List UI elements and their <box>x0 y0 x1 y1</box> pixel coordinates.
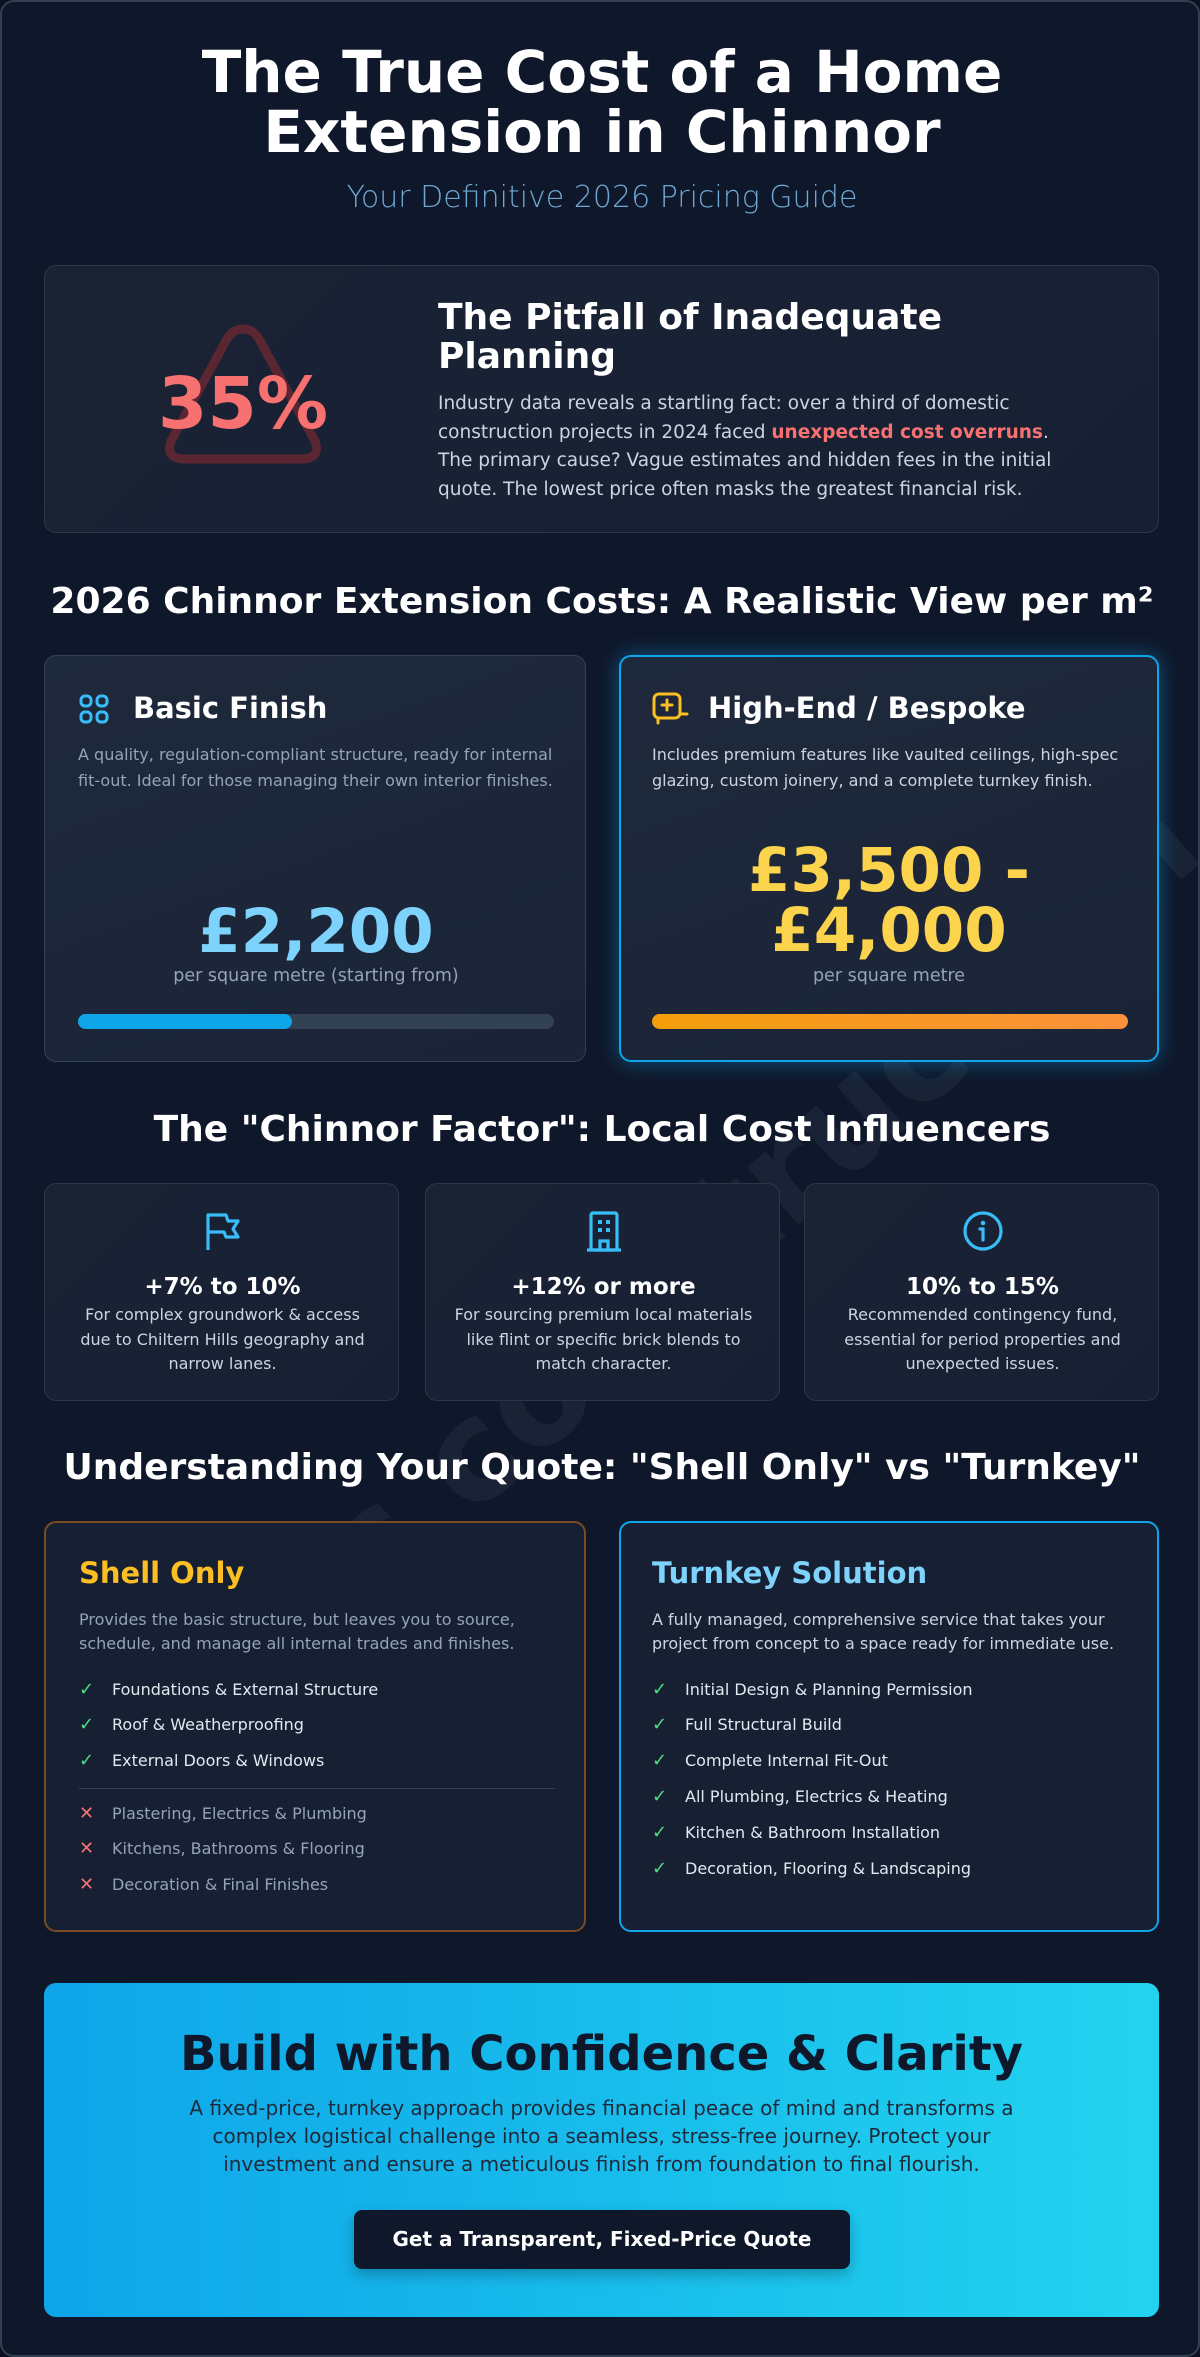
icon: flag <box>206 1213 240 1250</box>
panel: groundwork factor <box>44 1183 399 1401</box>
panel: shell only <box>44 1521 586 1932</box>
included list <box>79 1679 555 1895</box>
included list: ✓ <box>79 1679 94 1700</box>
included list: ✓ <box>79 1714 94 1735</box>
icon: warning triangle with 35% stat <box>158 324 328 464</box>
text: For sourcing premium local materials like flint or specific brick blends to match character. <box>455 1305 752 1373</box>
panel: pitfall <box>44 265 1159 533</box>
included list: Kitchen & Bathroom Installation <box>685 1823 940 1842</box>
included list: Roof & Weatherproofing <box>112 1715 304 1734</box>
description: A quality, regulation-compliant structure, ready for internal fit-out. Ideal for those managing their own interior finishes. <box>78 745 553 790</box>
included list: ✓ <box>652 1786 667 1807</box>
price: £4,000 <box>771 895 1007 966</box>
included list: Full Structural Build <box>685 1715 842 1734</box>
included list: Decoration, Flooring & Landscaping <box>685 1859 971 1878</box>
included list: ✕ <box>79 1874 94 1895</box>
included list: Foundations & External Structure <box>112 1680 378 1699</box>
included list: Kitchens, Bathrooms & Flooring <box>112 1839 365 1858</box>
included list: ✓ <box>652 1822 667 1843</box>
icon: warning triangle with 35% stat: 35% <box>158 362 328 445</box>
included list: ✓ <box>652 1714 667 1735</box>
price: £3,500 - <box>748 835 1030 906</box>
card title: Shell Only <box>79 1556 244 1590</box>
panel: basic finish <box>44 655 586 1062</box>
heading: costs: 2026 Chinnor Extension Costs: A Realistic View per m² <box>50 581 1154 622</box>
text: For complex groundwork & access due to Chiltern Hills geography and narrow lanes. <box>80 1305 365 1373</box>
body text: The primary cause? Vague estimates and hidden fees in the initial <box>438 450 1051 471</box>
included list: ✓ <box>652 1750 667 1771</box>
included list: ✓ <box>652 1679 667 1700</box>
icon: grid <box>80 694 108 724</box>
price unit: per square metre (starting from) <box>173 966 459 986</box>
description: A fully managed, comprehensive service that takes your project from concept to a space ready for immediate use. <box>652 1610 1114 1653</box>
included list: Complete Internal Fit-Out <box>685 1751 888 1770</box>
stat: +7% to 10% <box>144 1274 301 1300</box>
included list: Plastering, Electrics & Plumbing <box>112 1804 367 1823</box>
CTA body: A fixed-price, turnkey approach provides financial peace of mind and transforms a complex logistical challenge into a seamless, stress-free journey. Protect your investment and ensure a meticulous finish from foundation to final flourish. <box>189 2096 1014 2176</box>
body text: quote. The lowest price often masks the greatest financial risk. <box>438 478 1023 500</box>
card title: High-End / Bespoke <box>708 691 1026 725</box>
panel: contingency factor <box>804 1183 1159 1401</box>
title: Extension in Chinnor <box>263 98 941 166</box>
CTA button: Get a Transparent, Fixed-Price Quote <box>392 2227 811 2251</box>
stat: +12% or more <box>511 1274 696 1300</box>
included list: ✕ <box>79 1803 94 1824</box>
CTA button <box>354 2210 850 2269</box>
subtitle: Your Definitive 2026 Pricing Guide <box>347 180 857 215</box>
heading: The Pitfall of Inadequate <box>438 297 942 338</box>
heading <box>438 297 942 377</box>
price <box>748 835 1030 966</box>
heading: chinnor factor: The "Chinnor Factor": Local Cost Influencers <box>154 1109 1050 1150</box>
heading: Planning <box>438 336 616 377</box>
price unit: per square metre <box>813 966 965 986</box>
icon: info <box>963 1211 1003 1251</box>
heading: understanding quote: Understanding Your Quote: "Shell Only" vs "Turnkey" <box>63 1447 1140 1488</box>
included list: External Doors & Windows <box>112 1751 324 1770</box>
panel: call to action <box>44 1983 1159 2317</box>
icon: building <box>587 1211 621 1252</box>
card title: Basic Finish <box>133 691 327 725</box>
watermark: abc construction <box>142 760 1200 1763</box>
bar <box>652 1014 1128 1029</box>
included list: ✓ <box>79 1750 94 1771</box>
panel: high-end <box>619 655 1159 1062</box>
icon: sparkle frame <box>652 692 688 724</box>
description: Provides the basic structure, but leaves you to source, schedule, and manage all internal trades and finishes. <box>79 1610 515 1653</box>
stat: 10% to 15% <box>906 1274 1059 1300</box>
price: £2,200 <box>198 896 434 967</box>
body text: Industry data reveals a startling fact: over a third of domestic <box>438 393 1010 414</box>
included list: All Plumbing, Electrics & Heating <box>685 1787 948 1806</box>
text: Recommended contingency fund, essential for period properties and unexpected issues. <box>844 1305 1121 1373</box>
included list <box>652 1679 973 1879</box>
CTA heading: Build with Confidence & Clarity <box>180 2026 1023 2082</box>
card title: Turnkey Solution <box>652 1556 927 1590</box>
bar <box>78 1014 554 1029</box>
included list: Initial Design & Planning Permission <box>685 1680 973 1699</box>
panel: materials factor <box>425 1183 780 1401</box>
panel: turnkey <box>619 1521 1159 1932</box>
included list: ✕ <box>79 1838 94 1859</box>
body text <box>438 393 1051 500</box>
title <box>202 38 1002 166</box>
title: The True Cost of a Home <box>202 38 1002 106</box>
description: Includes premium features like vaulted ceilings, high-spec glazing, custom joinery, and a complete turnkey finish. <box>652 745 1118 790</box>
included list: Decoration & Final Finishes <box>112 1875 328 1894</box>
included list: ✓ <box>652 1858 667 1879</box>
body text: construction projects in 2024 faced unexpected cost overruns. <box>438 422 1049 442</box>
